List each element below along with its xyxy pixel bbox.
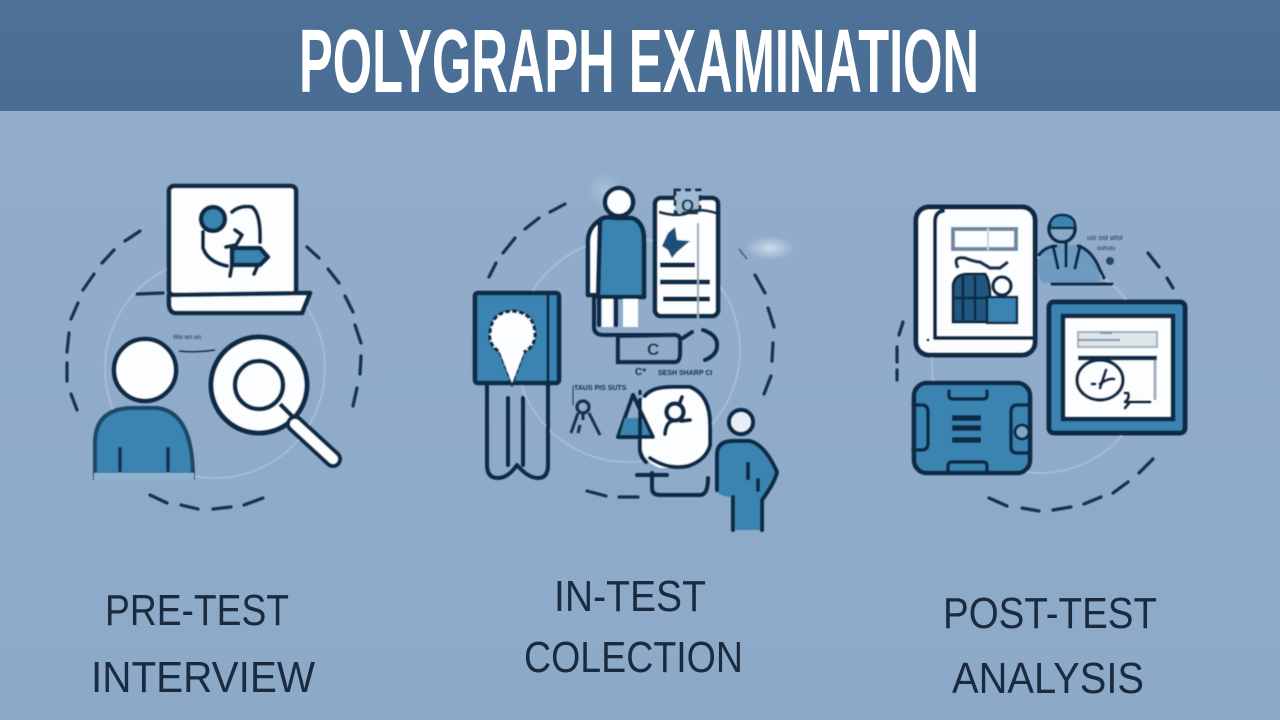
- icon: magnifying glass: [211, 337, 333, 459]
- label: in-test collection: COLECTION: [524, 633, 743, 682]
- label: in-test collection: IN-TEST: [554, 572, 706, 621]
- icon: device: C: [647, 340, 659, 359]
- panel: pre-test interview: [67, 186, 361, 702]
- header banner: [0, 0, 1280, 112]
- label: post-test analysis: POST-TEST: [943, 589, 1157, 638]
- icon: laptop: [169, 186, 310, 313]
- icon: analyst at desk: usr ost wtst: [1087, 235, 1122, 242]
- label: in-test collection: [524, 572, 743, 682]
- icon: standing woman: [588, 188, 674, 335]
- icon: device: [618, 330, 717, 362]
- icon: person: [94, 339, 194, 480]
- icon: examiner: [717, 410, 777, 530]
- small labels: C*: [635, 367, 646, 378]
- label: post-test analysis: [943, 589, 1157, 703]
- icon: report book: [916, 207, 1035, 355]
- icon: head with symbols: [618, 387, 710, 468]
- label: pre-test interview: PRE-TEST: [105, 586, 289, 635]
- small labels: [573, 367, 712, 405]
- caption note: Ww wn ws: [173, 335, 201, 341]
- dashed circle: [897, 253, 1173, 511]
- icon: analyst at desk: ouhutu: [1097, 246, 1115, 252]
- dashed circle: [67, 231, 361, 509]
- icon: small figure: [571, 401, 600, 435]
- dashed circle: [489, 204, 774, 497]
- arrow: feedback loop: [637, 473, 708, 495]
- icon: sensor board on legs: [475, 293, 559, 478]
- label: post-test analysis: ANALYSIS: [952, 654, 1144, 703]
- panel: post-test analysis: [897, 207, 1185, 703]
- icon: analyst at desk: [1038, 215, 1122, 284]
- small labels: SESH SHARP CI: [658, 370, 712, 377]
- icon: blue card: [913, 383, 1030, 473]
- panel: in-test collection: [475, 172, 794, 682]
- icon: clipboard: Q: [681, 196, 694, 215]
- pre-test illustration: [67, 186, 361, 509]
- caption note: [173, 335, 215, 352]
- in-test illustration: [475, 172, 794, 530]
- label: pre-test interview: [91, 586, 315, 702]
- small labels: TAUS PIS SUTS: [574, 385, 627, 392]
- label: pre-test interview: INTERVIEW: [91, 653, 315, 702]
- icon: clipboard: [655, 190, 718, 330]
- icon: tablet with signed document: [1049, 302, 1185, 433]
- post-test illustration: [897, 207, 1185, 511]
